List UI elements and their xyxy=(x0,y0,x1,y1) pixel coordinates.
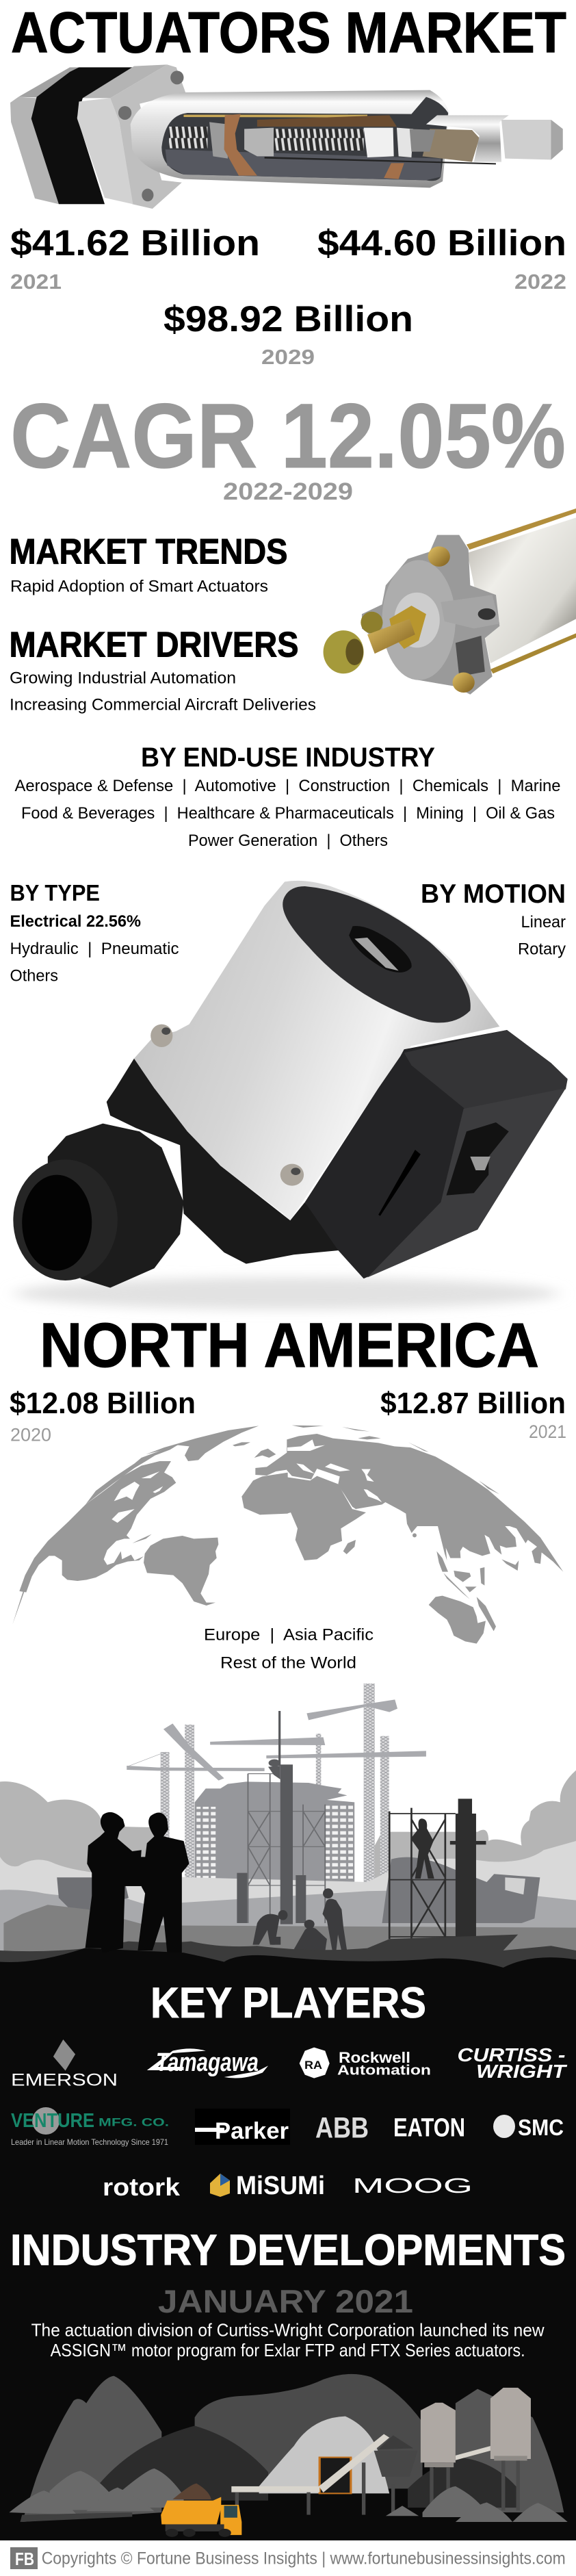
heading: market trends: MARKET TRENDS xyxy=(10,532,287,572)
stat: 2021 market size: 2021 xyxy=(10,270,62,294)
text: type list: Hydraulic | Pneumatic xyxy=(10,940,179,958)
logo: ABB: ABB xyxy=(315,2111,369,2144)
text: other regions: Europe | Asia Pacific xyxy=(204,1625,374,1644)
stat: 2022 market size xyxy=(317,223,566,294)
image: actuator pump xyxy=(13,881,568,1309)
stat: north america 2020: 2020 xyxy=(10,1425,51,1445)
logo: Venture Mfg: VENTURE xyxy=(11,2110,94,2132)
text: motion list: Rotary xyxy=(518,940,566,959)
logo: Venture Mfg: Leader in Linear Motion Technology Since 1971 xyxy=(11,2137,168,2147)
heading: by motion: BY MOTION xyxy=(421,879,566,909)
logo: Moog: MOOG xyxy=(352,2174,473,2198)
text: end-use industry list: Aerospace & Defense | Automotive | Construction | Chemicals | Marine xyxy=(15,777,561,795)
workers: centre xyxy=(252,1888,347,1952)
logo: Rotork: rotork xyxy=(103,2173,181,2201)
map: western hemisphere xyxy=(12,1426,288,1624)
stat: north america 2021: 2021 xyxy=(529,1421,566,1442)
excavator silhouette xyxy=(57,1877,129,1916)
building under construction xyxy=(195,1781,354,1882)
stat: north america 2020 xyxy=(10,1387,196,1445)
column: right xyxy=(450,1799,486,1942)
illustration: construction site xyxy=(0,1684,576,1985)
text: end-use industry list: Power Generation | Others xyxy=(188,832,388,850)
text: development description: The actuation division of Curtiss-Wright Corporation launched its new xyxy=(31,2320,545,2341)
panel: dark background xyxy=(0,1971,576,2540)
text: drivers list xyxy=(10,669,316,714)
text: end-use industry list: Food & Beverages | Healthcare & Pharmaceuticals | Mining | Oil & Gas xyxy=(21,804,555,823)
stat: 2021 market size: $41.62 Billion xyxy=(10,223,260,263)
logo: Parker xyxy=(195,2109,290,2145)
stat: 2029 market size xyxy=(163,299,413,369)
icon: Fortune Business Insights logo: FB xyxy=(15,2549,34,2569)
stat: north america 2021 xyxy=(380,1387,566,1442)
stat: north america 2020: $12.08 Billion xyxy=(10,1387,196,1420)
heading: development date: JANUARY 2021 xyxy=(158,2283,413,2319)
stat: 2022 market size: 2022 xyxy=(514,270,566,294)
image: linear actuator xyxy=(10,64,563,209)
mixer truck silhouette xyxy=(382,1857,540,1923)
map: eastern hemisphere xyxy=(287,1426,563,1644)
text: motion list xyxy=(518,913,566,959)
stat: 2022 market size: $44.60 Billion xyxy=(317,223,566,263)
stat: 2029 market size: 2029 xyxy=(261,345,315,369)
stat: north america 2021: $12.87 Billion xyxy=(380,1387,566,1420)
stat: CAGR: 2022-2029 xyxy=(223,478,353,505)
logo: Venture Mfg xyxy=(11,2107,169,2147)
text: drivers list: Increasing Commercial Aircraft Deliveries xyxy=(10,695,316,714)
logo: SMC: SMC xyxy=(518,2115,564,2140)
logo: Curtiss-Wright xyxy=(457,2044,568,2082)
stat: 2021 market size xyxy=(10,223,260,294)
footer xyxy=(0,2540,576,2576)
worker on scaffold xyxy=(410,1818,434,1879)
heading: by end-use industry: BY END-USE INDUSTRY xyxy=(141,743,435,773)
scaffold: centre xyxy=(248,1774,325,1923)
column: centre xyxy=(237,1711,306,1924)
crane: right group xyxy=(210,1684,426,1894)
text: other regions: Rest of the World xyxy=(220,1653,356,1673)
logo: Tamagawa: Tamagawa xyxy=(156,2048,259,2077)
map: world globe xyxy=(12,1426,563,1644)
text: other regions xyxy=(204,1625,374,1673)
logo: Parker: Parker xyxy=(215,2118,289,2144)
text: end-use industry list xyxy=(15,777,561,850)
text: drivers list: Growing Industrial Automation xyxy=(10,669,236,687)
logo: Curtiss-Wright: WRIGHT xyxy=(476,2061,568,2082)
text: type list: Others xyxy=(10,966,58,985)
scaffold: right xyxy=(389,1808,456,1939)
logo: Eaton: EATON xyxy=(393,2114,465,2143)
engineers silhouette xyxy=(86,1812,189,1953)
logo: Rockwell Automation: Automation xyxy=(337,2063,431,2078)
logo: Venture Mfg: MFG. CO. xyxy=(99,2116,169,2128)
stat: 2029 market size: $98.92 Billion xyxy=(163,299,413,339)
logo: SMC xyxy=(493,2115,564,2140)
heading: key players: KEY PLAYERS xyxy=(150,1979,426,2027)
text: trends item: Rapid Adoption of Smart Actuators xyxy=(10,578,268,596)
illustration: mining site xyxy=(9,2374,568,2537)
dump truck xyxy=(161,2484,241,2537)
text: motion list: Linear xyxy=(521,913,566,931)
logo: Emerson: EMERSON xyxy=(11,2071,118,2090)
logo: Emerson xyxy=(11,2039,118,2090)
heading: north america: NORTH AMERICA xyxy=(40,1311,539,1380)
text: type list: Electrical 22.56% xyxy=(10,912,141,931)
crane: left pair xyxy=(127,1723,265,1889)
gravel piles xyxy=(9,2469,568,2522)
text: type list xyxy=(10,912,179,985)
logo: Rockwell Automation: Rockwell xyxy=(339,2049,410,2066)
logo: Curtiss-Wright: CURTISS - xyxy=(457,2044,565,2065)
heading: by type: BY TYPE xyxy=(10,880,100,905)
text: development description: ASSIGN™ motor program for Exlar FTP and FTX Series actuators. xyxy=(51,2340,525,2360)
heading: market drivers: MARKET DRIVERS xyxy=(10,625,298,665)
logo: Rockwell Automation xyxy=(300,2048,431,2078)
text: development description xyxy=(31,2320,545,2360)
image: pneumatic cylinder xyxy=(324,508,576,695)
logo: Misumi: MiSUMi xyxy=(236,2172,325,2200)
logo: Rockwell Automation: RA xyxy=(304,2059,322,2072)
